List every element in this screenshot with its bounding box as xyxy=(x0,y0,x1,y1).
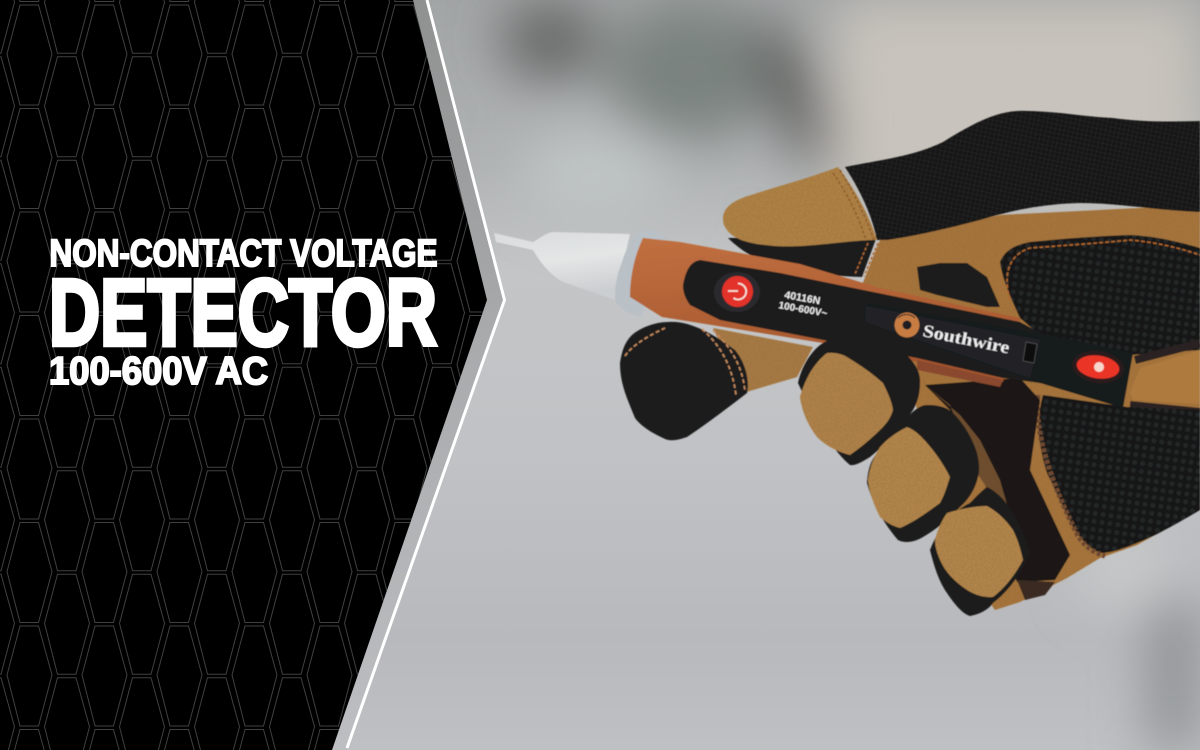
lower finger leather tip xyxy=(620,322,748,440)
chevron white outline xyxy=(347,0,504,748)
finger C black edge xyxy=(930,487,1030,616)
chevron translucent band xyxy=(332,0,505,750)
glove: small dark pad behind tester xyxy=(917,263,1000,307)
index finger tan suede xyxy=(723,167,877,246)
tester: model text: 100-600V~ xyxy=(778,300,828,320)
finger B xyxy=(867,405,979,542)
title block xyxy=(49,233,438,393)
icon: power symbol xyxy=(728,283,746,299)
glove: upper black palm pad xyxy=(1000,235,1200,355)
tester: black body panel xyxy=(683,260,1050,383)
tester: model text: 40116N xyxy=(783,289,821,307)
photo: gloved hand holding the tester xyxy=(494,111,1200,616)
finger A black edge xyxy=(798,331,920,465)
finger A tan pad xyxy=(800,353,893,455)
finger C tan pad xyxy=(935,506,1023,597)
tester: clip highlight xyxy=(865,306,1040,378)
voltage tester xyxy=(494,230,1133,408)
glove: brown cuff fold xyxy=(1017,580,1055,600)
finger B black edge xyxy=(867,405,979,542)
title line 1: NON-CONTACT VOLTAGE xyxy=(50,233,438,275)
glove: tan gap between fingers xyxy=(925,385,1010,525)
glove: right tan strap xyxy=(1130,350,1200,404)
glove: lower pad brown seam xyxy=(1037,395,1105,556)
index finger underside stitches xyxy=(855,243,878,276)
tester: flashlight button xyxy=(1070,348,1126,386)
tester: power button xyxy=(714,272,760,312)
brand wordmark: Southwire xyxy=(921,320,1012,358)
glove: dark inner palm fold xyxy=(925,378,1070,582)
tester: translucent tip xyxy=(494,232,630,300)
tester: clip xyxy=(863,303,1133,408)
glove: back-of-hand black mesh xyxy=(845,111,1200,240)
tester: orange body xyxy=(630,238,1020,382)
finger B tan pad xyxy=(868,427,950,528)
black panel xyxy=(0,0,487,750)
index finger black underside xyxy=(728,236,877,277)
glove: seam rows right xyxy=(1130,343,1200,412)
finger C xyxy=(930,487,1030,616)
glove: lower black palm pad xyxy=(1039,395,1200,553)
tester: translucent ring xyxy=(615,230,665,316)
glove: lower palm tan base xyxy=(860,205,1200,610)
finger A xyxy=(798,331,920,465)
lower finger tan section xyxy=(713,328,813,393)
hexagon background pattern xyxy=(0,0,487,750)
tester: model text xyxy=(778,288,830,320)
subtitle voltage range: 100-600V AC xyxy=(49,350,268,393)
tester: orange lower strip xyxy=(917,360,1003,387)
lower finger seam xyxy=(625,328,745,395)
tester: switch window xyxy=(1023,342,1037,363)
glove: seam on upper pad xyxy=(1007,240,1200,300)
icon: Southwire logo xyxy=(894,312,920,338)
index finger stitches xyxy=(833,170,874,240)
title line 2: DETECTOR xyxy=(49,260,437,366)
